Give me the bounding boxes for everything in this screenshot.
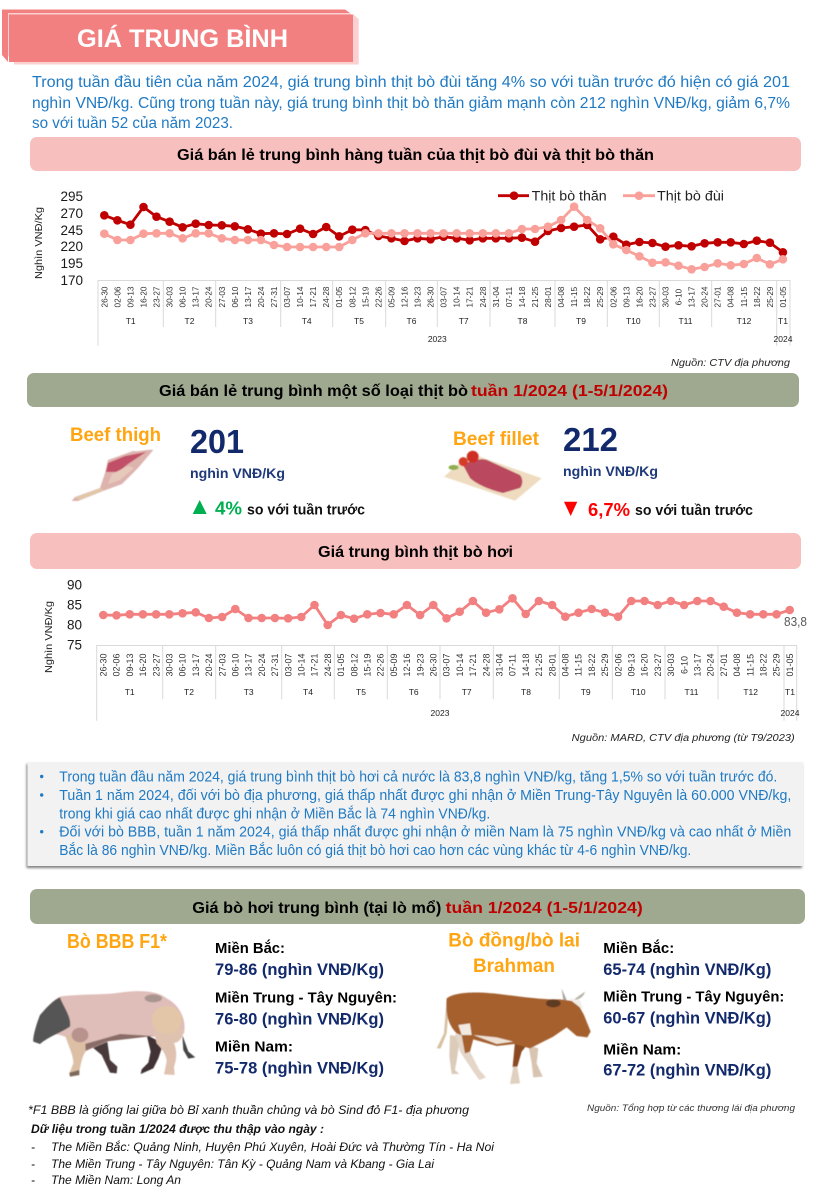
- data collection notes: -: [31, 1140, 35, 1154]
- intro text: so với tuần 52 của năm 2023.: [32, 115, 233, 132]
- x axis month and year labels: T7: [462, 687, 472, 697]
- legend: [498, 188, 724, 204]
- panel: beef thigh price: 201: [190, 423, 244, 460]
- icon: BBB bull: [33, 991, 195, 1077]
- x axis week labels: 13-17: [191, 653, 201, 677]
- x axis week labels: 07-11: [508, 654, 518, 676]
- panel: beef thigh price: [70, 423, 365, 518]
- x axis week labels: 20-24: [701, 286, 710, 307]
- x axis week labels: 27-01: [719, 653, 729, 677]
- x axis month and year labels: T10: [626, 316, 641, 326]
- x axis week labels: 27-31: [270, 286, 279, 307]
- panel: key points: Đối với bò BBB, tuần 1 năm 2024, giá thấp nhất được ghi nhận ở miền Nam là 75 nghìn VNĐ/kg và cao nhất ở Miền: [59, 824, 791, 840]
- panel: local and Brahman cattle: 67-72 (nghìn VNĐ/Kg): [603, 1061, 771, 1080]
- x axis month and year labels: T1: [126, 316, 136, 326]
- x axis week labels: 27-03: [217, 653, 227, 677]
- x axis week labels: 06-10: [178, 653, 188, 677]
- x axis week labels: 26-30: [428, 653, 438, 677]
- panel: beef fillet price: Beef fillet: [453, 429, 540, 450]
- x axis week labels: 04-08: [560, 653, 570, 677]
- x axis month and year labels: T5: [356, 687, 366, 697]
- x axis week labels: 02-06: [609, 286, 618, 307]
- x axis week labels: 01-05: [336, 653, 346, 677]
- panel: beef fillet price: nghìn VNĐ/Kg: [563, 464, 658, 479]
- x axis month and year labels: T5: [354, 316, 364, 326]
- x axis week labels: 03-07: [440, 286, 449, 307]
- heading band: live cattle price: [30, 533, 801, 569]
- x axis week labels: 11-15: [745, 654, 755, 676]
- x axis month and year labels: T10: [631, 687, 646, 697]
- x axis week labels: 31-04: [492, 286, 501, 307]
- x axis week labels: 14-18: [518, 286, 527, 307]
- x axis week labels: 16-20: [140, 286, 148, 307]
- x axis week labels: 21-25: [534, 653, 544, 677]
- x axis week labels: [98, 653, 795, 677]
- x axis week labels: 20-24: [706, 653, 716, 677]
- x axis month and year labels: T1: [125, 687, 135, 697]
- x axis week labels: 6-10: [679, 656, 689, 674]
- x axis month and year labels: T1: [778, 316, 788, 326]
- panel: key points: Bắc là 86 nghìn VNĐ/kg. Miền Bắc luôn có giá thịt bò hơi cao hơn các vùng khác từ 4-6 nghìn VNĐ/kg.: [59, 842, 691, 859]
- panel: local and Brahman cattle: Brahman: [473, 955, 555, 977]
- panel: local and Brahman cattle: [437, 930, 784, 1084]
- series: live cattle price: [103, 598, 790, 625]
- y axis labels: 80: [67, 618, 82, 632]
- x axis week labels: 01-05: [785, 653, 795, 677]
- x axis month and year labels: T9: [576, 316, 586, 326]
- x axis week labels: 05-09: [389, 653, 399, 677]
- x axis week labels: 16-20: [138, 653, 148, 677]
- y axis labels: 170: [60, 273, 83, 288]
- x axis week labels: 31-04: [494, 653, 504, 677]
- x axis week labels: 25-29: [600, 653, 610, 677]
- intro text: nghìn VNĐ/kg. Cũng trong tuần này, giá trung bình thịt bò thăn giảm mạnh còn 212 nghìn VNĐ/kg, giảm 6,7%: [32, 95, 790, 112]
- x axis month and year labels: T11: [678, 316, 693, 326]
- panel: beef thigh price: 4%: [215, 498, 242, 518]
- panel: BBB F1 cattle: Miền Trung - Tây Nguyên:: [215, 991, 397, 1007]
- panel: BBB F1 cattle: Bò BBB F1*: [67, 931, 167, 953]
- heading band: retail price by cut: tuần 1/2024 (1-5/1/2024): [471, 383, 668, 400]
- x axis week labels: 09-13: [126, 286, 135, 307]
- x axis week labels: 23-27: [648, 286, 657, 307]
- x axis week labels: 18-22: [583, 286, 592, 307]
- icon: brown cow: [437, 988, 591, 1084]
- x axis week labels: 06-10: [230, 653, 240, 677]
- intro text: [32, 74, 790, 132]
- x axis week labels: 26-30: [427, 286, 436, 307]
- x axis week labels: 08-12: [349, 653, 359, 677]
- x axis month and year labels: T2: [184, 687, 194, 697]
- x axis week labels: 03-07: [442, 653, 452, 677]
- x axis month and year labels: T12: [743, 687, 758, 697]
- x axis week labels: 05-09: [387, 286, 396, 307]
- panel: BBB F1 cattle: 75-78 (nghìn VNĐ/Kg): [215, 1058, 384, 1077]
- line chart: live cattle price: [43, 578, 807, 721]
- x axis month and year labels: 2023: [428, 334, 447, 344]
- source note chart 2: Nguồn: MARD, CTV địa phương (từ T9/2023): [572, 732, 795, 744]
- footnote: *F1 BBB là giống lai giữa bò Bỉ xanh thuần chủng và bò Sind đỏ F1- địa phương: [28, 1103, 469, 1117]
- x axis week labels: 16-20: [635, 286, 644, 307]
- x axis month and year labels: T8: [521, 687, 531, 697]
- data collection notes: -: [31, 1173, 35, 1187]
- x axis month and year labels: 2024: [774, 334, 793, 344]
- heading band: slaughterhouse price: tuần 1/2024 (1-5/1/2024): [446, 900, 643, 917]
- y axis labels: 245: [60, 223, 83, 238]
- legend: Thịt bò thăn: [532, 188, 607, 204]
- x axis week labels: 01-05: [335, 286, 344, 307]
- x axis week labels: 13-17: [692, 653, 702, 677]
- panel: beef fillet price: 212: [563, 421, 618, 458]
- x axis month and year labels: [126, 316, 793, 344]
- y axis labels: 85: [67, 598, 82, 612]
- y axis labels: 295: [60, 189, 83, 204]
- x axis week labels: 04-08: [727, 286, 736, 307]
- panel: BBB F1 cattle: 76-80 (nghìn VNĐ/Kg): [215, 1009, 384, 1028]
- panel: local and Brahman cattle: Miền Bắc:: [603, 939, 674, 957]
- x axis week labels: 09-13: [125, 653, 135, 677]
- x axis week labels: 09-13: [626, 653, 636, 677]
- x axis month and year labels: 2023: [431, 708, 450, 718]
- heading band: weekly retail price: [30, 137, 801, 171]
- panel: local and Brahman cattle: Miền Trung - Tây Nguyên:: [603, 990, 784, 1006]
- x axis week labels: 06-10: [231, 286, 240, 307]
- x axis week labels: 09-13: [622, 286, 631, 307]
- x axis week labels: 11-15: [574, 654, 584, 676]
- x axis week labels: 17-21: [468, 653, 478, 677]
- x axis week labels: 23-27: [653, 653, 663, 677]
- x axis week labels: 24-28: [323, 653, 333, 677]
- x axis week labels: 11-15: [570, 286, 579, 307]
- x axis week labels: 11-15: [740, 286, 749, 307]
- x axis week labels: 10-14: [453, 286, 462, 307]
- x axis week labels: 25-29: [596, 286, 605, 307]
- panel: beef fillet price: so với tuần trước: [635, 503, 753, 519]
- x axis week labels: 20-24: [204, 653, 214, 677]
- x axis week labels: [100, 286, 788, 307]
- panel: local and Brahman cattle: 60-67 (nghìn VNĐ/Kg): [603, 1008, 771, 1027]
- x axis week labels: 13-17: [688, 286, 697, 307]
- heading band: live cattle price: Giá trung bình thịt bò hơi: [318, 544, 513, 561]
- panel: BBB F1 cattle: 79-86 (nghìn VNĐ/Kg): [215, 960, 384, 979]
- panel: local and Brahman cattle: Miền Nam:: [603, 1042, 681, 1058]
- x axis week labels: 19-23: [415, 653, 425, 677]
- x axis week labels: 18-22: [587, 653, 597, 677]
- panel: local and Brahman cattle: 65-74 (nghìn VNĐ/Kg): [603, 960, 771, 979]
- x axis week labels: 04-08: [732, 653, 742, 677]
- panel: key points: [28, 762, 803, 866]
- heading band: slaughterhouse price: [30, 889, 805, 924]
- title banner: [2, 10, 359, 64]
- icon: beef fillet on board: [444, 451, 542, 501]
- x axis week labels: 26-30: [100, 286, 109, 307]
- x axis month and year labels: T8: [518, 316, 528, 326]
- x axis month and year labels: T1: [785, 687, 795, 697]
- x axis month and year labels: 2024: [781, 708, 800, 718]
- y axis title: Nghìn VNĐ/Kg: [43, 601, 55, 673]
- x axis month and year labels: T7: [459, 316, 469, 326]
- y axis labels: 195: [60, 256, 83, 271]
- x axis month and year labels: T3: [243, 316, 253, 326]
- x axis month and year labels: T11: [684, 687, 699, 697]
- y axis labels: 220: [60, 239, 83, 254]
- panel: BBB F1 cattle: Miền Nam:: [215, 1040, 293, 1056]
- legend: Thịt bò đùi: [657, 188, 724, 204]
- data label: last value: 83,8: [784, 615, 807, 629]
- data collection notes: The Miền Nam: Long An: [51, 1173, 181, 1187]
- x axis week labels: 10-14: [455, 653, 465, 677]
- x axis week labels: 17-21: [309, 286, 318, 307]
- x axis week labels: 18-22: [758, 653, 768, 677]
- x axis week labels: 26-30: [98, 653, 108, 677]
- panel: local and Brahman cattle: Bò đồng/bò lai: [448, 930, 580, 952]
- series: thịt bò thăn: [104, 207, 783, 252]
- x axis week labels: 02-06: [613, 653, 623, 677]
- x axis week labels: 13-17: [244, 286, 253, 307]
- y axis labels: 90: [67, 578, 82, 592]
- x axis week labels: 13-17: [192, 286, 201, 307]
- panel: beef thigh price: Beef thigh: [70, 425, 161, 446]
- x axis week labels: 15-19: [361, 286, 370, 307]
- x axis week labels: 23-27: [151, 653, 161, 677]
- panel: beef fillet price: 6,7%: [588, 500, 630, 520]
- series: thịt bò đùi: [104, 207, 783, 269]
- x axis week labels: 30-03: [166, 286, 175, 307]
- heading band: slaughterhouse price: Giá bò hơi trung bình (tại lò mổ): [192, 899, 441, 917]
- x axis week labels: 28-01: [547, 653, 557, 677]
- x axis month and year labels: T12: [737, 316, 752, 326]
- heading band: retail price by cut: Giá bán lẻ trung bình một số loại thịt bò: [159, 383, 468, 400]
- y axis labels: [67, 578, 82, 652]
- panel: key points: Trong tuần đầu năm 2024, giá trung bình thịt bò hơi cả nước là 83,8 nghìn VNĐ/kg, tăng 1,5% so với tuần trước đó.: [59, 770, 777, 786]
- x axis month and year labels: T9: [581, 687, 591, 697]
- x axis month and year labels: [125, 687, 800, 718]
- x axis week labels: 12-16: [402, 653, 412, 677]
- icon: beef thigh: [72, 450, 153, 501]
- x axis month and year labels: T4: [303, 687, 313, 697]
- x axis week labels: 23-27: [152, 286, 162, 307]
- x axis month and year labels: T3: [244, 687, 254, 697]
- x axis week labels: 22-26: [374, 286, 383, 307]
- x axis week labels: 04-08: [557, 286, 566, 307]
- x axis week labels: 22-26: [376, 653, 386, 677]
- y axis labels: 75: [67, 638, 82, 652]
- x axis week labels: 24-28: [322, 286, 331, 307]
- heading band: weekly retail price: Giá bán lẻ trung bình hàng tuần của thịt bò đùi và thịt bò thăn: [177, 147, 654, 164]
- panel: BBB F1 cattle: [33, 931, 397, 1077]
- source note cattle: Nguồn: Tổng hợp từ các thương lái địa phương: [587, 1103, 795, 1113]
- x axis week labels: 02-06: [112, 653, 122, 677]
- y axis labels: [60, 189, 83, 288]
- data collection notes: The Miền Trung - Tây Nguyên: Tân Kỳ - Quảng Nam và Kbang - Gia Lai: [51, 1157, 434, 1171]
- panel: beef thigh price: nghìn VNĐ/Kg: [190, 466, 285, 481]
- x axis month and year labels: T6: [409, 687, 419, 697]
- icon: down arrow: [564, 502, 577, 516]
- x axis week labels: 17-21: [310, 653, 320, 677]
- x axis week labels: 24-28: [481, 653, 491, 677]
- x axis week labels: 6-10: [674, 288, 684, 305]
- x axis week labels: 20-24: [257, 653, 267, 677]
- x axis week labels: 27-31: [270, 653, 280, 677]
- panel: key points: Tuần 1 năm 2024, đối với bò địa phương, giá thấp nhất được ghi nhận ở Miền Trung-Tây Nguyên là 60.000 VNĐ/kg,: [59, 788, 791, 804]
- x axis week labels: 16-20: [640, 653, 650, 677]
- x axis week labels: 17-21: [466, 286, 475, 307]
- x axis week labels: 01-05: [779, 286, 788, 307]
- x axis week labels: 06-10: [179, 286, 188, 307]
- x axis week labels: 30-03: [666, 653, 676, 677]
- y axis labels: 270: [60, 206, 83, 221]
- data collection notes: [31, 1122, 494, 1187]
- x axis week labels: 07-11: [505, 286, 514, 307]
- data collection notes: -: [31, 1157, 35, 1171]
- x axis week labels: 27-01: [714, 286, 723, 307]
- x axis week labels: 30-03: [662, 286, 670, 307]
- line chart: beef fillet and thigh retail price: [33, 188, 793, 346]
- panel: beef fillet price: [444, 421, 753, 520]
- x axis week labels: 20-24: [257, 286, 266, 307]
- x axis week labels: 27-03: [218, 286, 227, 307]
- x axis week labels: 03-07: [283, 286, 292, 307]
- x axis week labels: 21-25: [531, 286, 540, 307]
- x axis week labels: 02-06: [113, 286, 122, 307]
- panel: key points: trong khi giá cao nhất được ghi nhận ở Miền Bắc là 74 nghìn VNĐ/kg.: [59, 806, 490, 822]
- x axis week labels: 08-12: [348, 286, 357, 307]
- x axis week labels: 30-03: [164, 653, 174, 677]
- x axis week labels: 03-07: [283, 653, 293, 677]
- panel: beef thigh price: so với tuần trước: [247, 502, 365, 518]
- x axis week labels: 28-01: [544, 286, 553, 307]
- x axis week labels: 25-29: [766, 286, 775, 307]
- x axis week labels: 14-18: [521, 653, 531, 677]
- x axis week labels: 25-29: [772, 653, 782, 677]
- panel: BBB F1 cattle: Miền Bắc:: [215, 939, 285, 957]
- x axis week labels: 15-19: [362, 653, 372, 677]
- x axis week labels: 18-22: [753, 286, 762, 307]
- x axis month and year labels: T4: [302, 316, 312, 326]
- data collection notes: The Miền Bắc: Quảng Ninh, Huyện Phú Xuyên, Hoài Đức và Thường Tín - Ha Noi: [51, 1139, 494, 1154]
- icon: up arrow: [193, 500, 207, 514]
- y axis title: Nghìn VNĐ/Kg: [33, 207, 45, 279]
- title: GIÁ TRUNG BÌNH: [77, 24, 288, 53]
- x axis week labels: 10-14: [296, 653, 306, 677]
- x axis week labels: 13-17: [244, 653, 254, 677]
- x axis week labels: 12-16: [400, 286, 410, 307]
- x axis month and year labels: T6: [407, 316, 417, 326]
- x axis week labels: 19-23: [414, 286, 422, 307]
- heading band: retail price by cut: [27, 373, 799, 407]
- x axis week labels: 20-24: [205, 286, 214, 307]
- intro text: Trong tuần đầu tiên của năm 2024, giá trung bình thịt bò đùi tăng 4% so với tuần trước đó hiện có giá 201: [32, 74, 790, 91]
- x axis month and year labels: T2: [185, 316, 195, 326]
- x axis week labels: 24-28: [479, 286, 488, 307]
- x axis week labels: 10-14: [296, 286, 305, 307]
- data collection notes: Dữ liệu trong tuần 1/2024 được thu thập vào ngày :: [31, 1122, 324, 1136]
- source note chart 1: Nguồn: CTV địa phương: [671, 357, 790, 369]
